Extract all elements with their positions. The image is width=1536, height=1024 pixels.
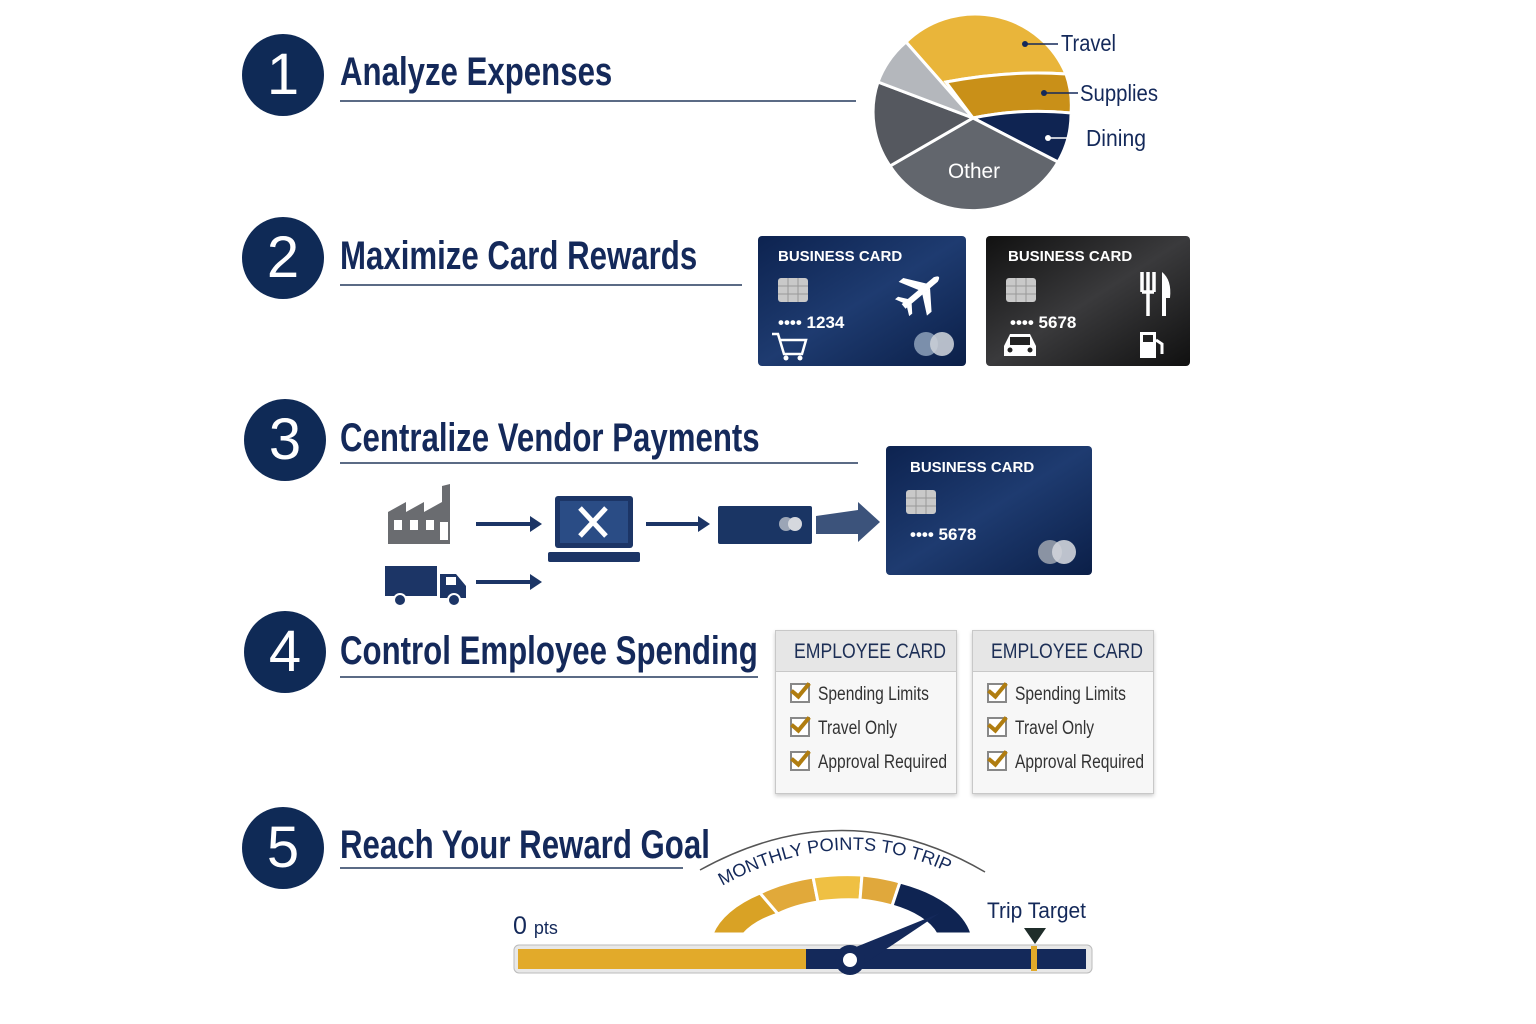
employee card 2: [972, 630, 1154, 794]
step 5 title: Reach Your Reward Goal: [340, 823, 710, 867]
reward gauge: MONTHLY POINTS TO TRIP: [718, 837, 952, 886]
employee card 1: Spending Limits: [818, 684, 929, 705]
step 2 title: Maximize Card Rewards: [340, 234, 697, 278]
employee card 2: Approval Required: [1015, 752, 1144, 773]
step 1 number: 1: [267, 42, 299, 107]
card: business 5678 large: [886, 446, 1092, 575]
card: business 5678 large: •••• 5678: [910, 525, 976, 544]
reward gauge: 0 pts: [513, 912, 558, 940]
card: business 5678 large: BUSINESS CARD: [910, 459, 1034, 476]
step 2 number: [242, 217, 324, 299]
step 1 title: Analyze Expenses: [340, 50, 612, 94]
card: business 5678 black: [986, 236, 1190, 366]
employee card 1: Approval Required: [818, 752, 947, 773]
card: business 1234: [758, 236, 966, 366]
step 4 number: 4: [269, 619, 301, 684]
employee card 2: EMPLOYEE CARD: [991, 640, 1143, 663]
reward gauge: Trip Target: [987, 898, 1086, 923]
employee card 1: [775, 630, 957, 794]
card: business 1234: •••• 1234: [778, 313, 845, 332]
step 3 number: [244, 399, 326, 481]
employee card 1: EMPLOYEE CARD: [794, 640, 946, 663]
employee card 2: Travel Only: [1015, 718, 1094, 739]
step 5 number: [242, 807, 324, 889]
step 3 number: 3: [269, 407, 301, 472]
employee card 1: Travel Only: [818, 718, 897, 739]
employee card 2: Spending Limits: [1015, 684, 1126, 705]
step 4 title: Control Employee Spending: [340, 629, 758, 673]
card: business 1234: BUSINESS CARD: [778, 248, 902, 265]
vendor payment flow: [385, 484, 880, 605]
pie chart: Travel: [1061, 30, 1116, 56]
reward gauge: [514, 830, 1092, 975]
card: business 5678 black: •••• 5678: [1010, 313, 1076, 332]
step 5 number: 5: [267, 815, 299, 880]
step 2 number: 2: [267, 225, 299, 290]
pie chart: Dining: [1086, 125, 1146, 151]
pie chart: Supplies: [1080, 80, 1158, 106]
step 3 title: Centralize Vendor Payments: [340, 416, 760, 460]
card: business 5678 black: BUSINESS CARD: [1008, 248, 1132, 265]
pie chart: Other: [948, 160, 1000, 183]
step 1 number: [242, 34, 324, 116]
step 4 number: [244, 611, 326, 693]
